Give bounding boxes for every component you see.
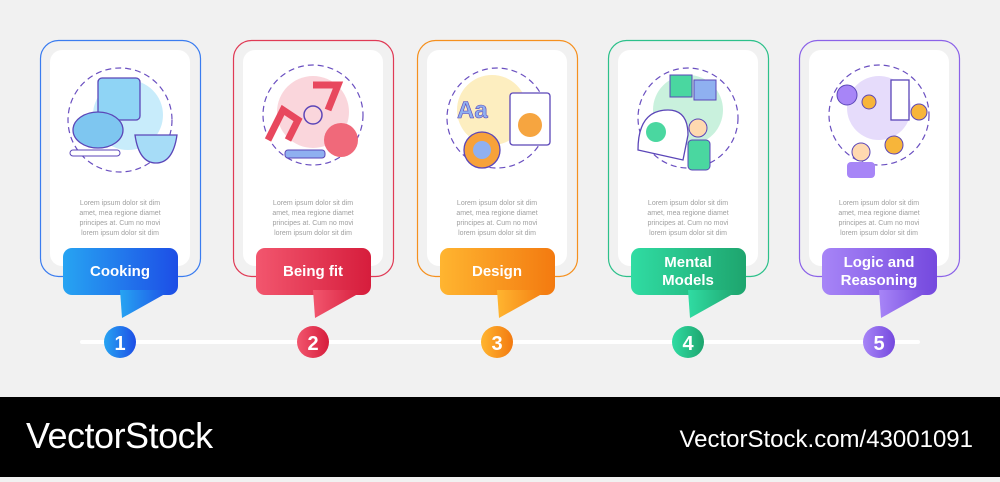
icon: design: [447, 68, 550, 168]
text block: Lorem ipsum dolor sit dim: [80, 200, 160, 207]
text block: Lorem ipsum dolor sit dim: [839, 200, 919, 207]
timeline line: [80, 340, 920, 344]
number 2: 2: [307, 333, 319, 355]
number 1: [104, 326, 136, 358]
label tab: [256, 248, 371, 318]
icon: cooking: [68, 68, 177, 172]
label tab: Cooking: [90, 263, 150, 280]
text block: lorem ipsum dolor sit dim: [458, 230, 536, 237]
text block: amet, mea regione diamet: [647, 210, 729, 217]
step 1: Cooking: [40, 40, 200, 358]
text block: principes at. Cum no movi: [457, 220, 538, 227]
label tab: [440, 248, 555, 318]
footer url: VectorStock.com/43001091: [679, 426, 973, 453]
text block: principes at. Cum no movi: [648, 220, 729, 227]
text block: Lorem ipsum dolor sit dim: [648, 200, 728, 207]
step 2: Being fit: [234, 40, 394, 358]
icon: fitness: [263, 65, 363, 165]
number 4: 4: [682, 333, 694, 355]
label tab: Reasoning: [841, 272, 917, 289]
footer bar: [0, 397, 1000, 477]
number 3: [481, 326, 513, 358]
label tab: Design: [472, 263, 522, 280]
label tab: Logic and: [844, 254, 914, 271]
text block: lorem ipsum dolor sit dim: [840, 230, 918, 237]
label tab: [631, 248, 746, 318]
number 2: [297, 326, 329, 358]
icon: mental models: [638, 68, 738, 170]
text block: lorem ipsum dolor sit dim: [649, 230, 727, 237]
label tab: [822, 248, 937, 318]
text block: principes at. Cum no movi: [80, 220, 161, 227]
footer logo: VectorStock: [26, 415, 214, 456]
text block: amet, mea regione diamet: [272, 210, 354, 217]
number 5: [863, 326, 895, 358]
icon: logic: [829, 65, 929, 178]
text block: Lorem ipsum dolor sit dim: [457, 200, 537, 207]
text block: lorem ipsum dolor sit dim: [274, 230, 352, 237]
icon: design: Aa: [457, 97, 488, 124]
label tab: Being fit: [283, 263, 343, 280]
number 5: 5: [873, 333, 885, 355]
number 1: 1: [114, 333, 126, 355]
step 3: Design: [418, 40, 578, 358]
step 4: Mental Models: [608, 40, 768, 358]
text block: amet, mea regione diamet: [456, 210, 538, 217]
text block: principes at. Cum no movi: [273, 220, 354, 227]
text block: amet, mea regione diamet: [838, 210, 920, 217]
text block: principes at. Cum no movi: [839, 220, 920, 227]
number 3: 3: [491, 333, 503, 355]
label tab: Mental: [664, 254, 712, 271]
text block: amet, mea regione diamet: [79, 210, 161, 217]
text block: Lorem ipsum dolor sit dim: [273, 200, 353, 207]
number 4: [672, 326, 704, 358]
step 5: Logic and Reasoning: [800, 40, 960, 358]
label tab: Models: [662, 272, 714, 289]
text block: lorem ipsum dolor sit dim: [81, 230, 159, 237]
label tab: [63, 248, 178, 318]
